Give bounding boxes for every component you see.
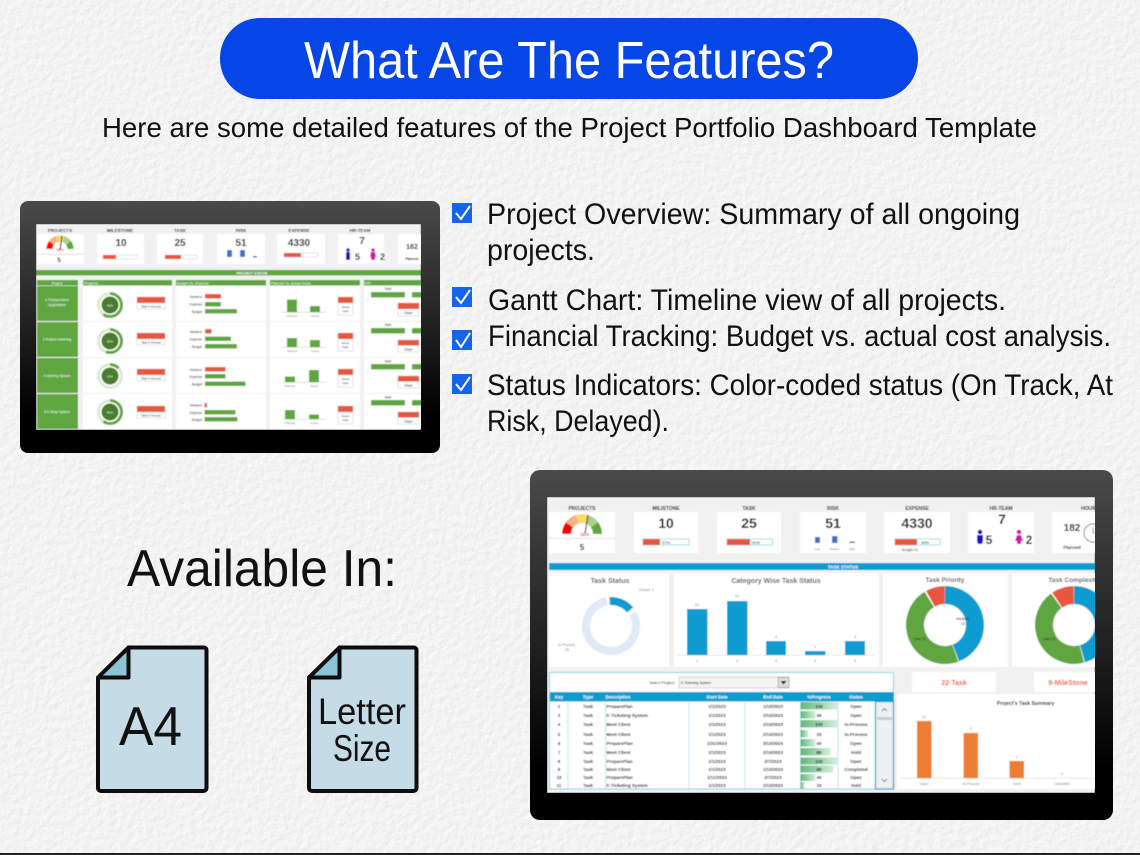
project row 1: Gain: [343, 309, 349, 313]
task table: Task: [583, 704, 593, 709]
task table: 40: [816, 713, 822, 718]
project row 4: Expense: [190, 411, 202, 415]
KPI cards: [549, 506, 1112, 553]
chart: category wise task status: 1: [696, 659, 698, 663]
task table: 2/15/2023: [763, 783, 784, 788]
KPI cards: Low: [815, 547, 821, 551]
chart: category wise task status: 10: [695, 603, 699, 607]
chart: project's task summary: 1: [1016, 755, 1018, 759]
task table: Open: [850, 741, 862, 746]
KPI row: RISK: [236, 228, 247, 233]
KPI row: 51: [235, 238, 247, 249]
project row 4: Budget: [192, 418, 202, 422]
project row 1: 60%: [107, 304, 113, 308]
KPI cards: 7: [998, 511, 1006, 527]
project row 2: Days: [405, 348, 413, 352]
KPI cards: High: [849, 547, 855, 551]
task table: 1/1/2023: [708, 732, 726, 737]
project row 3: Variance: [190, 368, 202, 372]
project row 4: Actual: [310, 421, 318, 425]
chart: category wise task status: 4: [814, 659, 816, 663]
task table: In-Process: [844, 722, 868, 727]
icon: A4 document: [98, 648, 206, 791]
task table: Task: [583, 741, 593, 746]
KPI cards: TASK: [742, 506, 756, 512]
chart: project's task summary: Project's Task Summary: [997, 701, 1054, 707]
column headers: Progress: [84, 282, 98, 286]
task table: Open: [850, 775, 862, 780]
project row 1: Hours: [342, 305, 350, 309]
feature checklist: [452, 198, 1113, 438]
KPI row: MILESTONE: [107, 228, 133, 233]
chart: project's task summary: 0: [1061, 772, 1063, 776]
chart: category wise task status: 1: [814, 645, 816, 649]
chart: task status donut: Task Status: [591, 578, 629, 585]
icon: Letter Size document: [309, 648, 416, 791]
task table: 100: [815, 704, 823, 709]
feature: status indicators: [487, 369, 1113, 438]
project row 4: Hours: [342, 414, 350, 418]
chart: category wise task status: 3: [775, 659, 777, 663]
task table: 2/7/2023: [764, 775, 782, 780]
KPI row: 2: [380, 252, 385, 262]
column headers: [37, 280, 424, 286]
task table: Task: [583, 767, 593, 772]
task table: 1/1/2023: [708, 759, 726, 764]
task table: 1/1/2023: [708, 767, 726, 772]
task table: [550, 672, 894, 789]
KPI row: 4330: [288, 238, 311, 249]
task table: Task: [583, 783, 593, 788]
project row 3: Hours: [342, 377, 350, 381]
task table: Task: [583, 732, 593, 737]
project row 3: Planned: [285, 384, 296, 388]
task table: 40: [816, 775, 822, 780]
task table: Open: [850, 704, 862, 709]
chart: task priority donut: Low, 11: [914, 637, 926, 641]
KPI cards: 5: [580, 543, 585, 552]
project row 1: Days: [405, 311, 413, 315]
KPI cards: HOURS: [1081, 506, 1100, 512]
project row 1: Expense: [190, 302, 202, 306]
project row 2: Task In Process: [141, 340, 161, 344]
chart: task priority donut: 13: [961, 622, 965, 626]
feature: gantt chart: Gantt Chart: Timeline view of all projects.: [488, 284, 1006, 317]
project status bar: PROJECT STATUS: [237, 272, 268, 276]
count cards: 22-Task: [941, 680, 967, 687]
task table: In-Process: [844, 732, 868, 737]
chart: task priority donut: Medium,: [956, 617, 970, 621]
feature: status indicators: Status Indicators: Color-coded status (On Track, At: [487, 369, 1113, 402]
task table: 90: [816, 767, 822, 772]
chart: task complexity donut: [1012, 572, 1095, 668]
column headers: Project: [52, 282, 62, 286]
project row 2: Actual: [311, 349, 319, 353]
task table: PreparePlan: [606, 704, 633, 709]
KPI cards: MILISTONE: [652, 506, 680, 512]
task table: 5: [558, 732, 561, 737]
KPI cards: Medium: [830, 547, 841, 551]
chart: category wise task status: [674, 573, 879, 667]
project row 4: 5-E-Shop System: [44, 410, 70, 414]
KPI cards: RISK: [827, 506, 839, 512]
feature: project overview: [487, 198, 1020, 267]
title pill: What Are The Features?: [304, 32, 834, 90]
task table: 1/1/2023: [708, 722, 726, 727]
bottom edge line: [0, 853, 1140, 855]
chart: category wise task status: Category Wise Task Status: [731, 578, 821, 585]
KPI cards: 5: [986, 533, 993, 547]
KPI cards: EXPENSE: [905, 506, 929, 512]
feature: status indicators: Risk, Delayed).: [487, 405, 669, 438]
task table: E-Ticketing System: [606, 713, 648, 718]
project row 1: Actual: [311, 314, 319, 318]
chart: category wise task status: 12: [735, 594, 739, 598]
project row 2: [37, 322, 424, 357]
task table: PreparePlan: [606, 741, 633, 746]
project row 4: [37, 394, 424, 429]
task table: 3/10/2023: [763, 741, 784, 746]
KPI cards: HR-TEAM: [989, 506, 1013, 512]
task table: Meet Client: [606, 767, 631, 772]
task table: Meet Client: [606, 750, 631, 755]
chart: category wise task status: 2: [736, 659, 738, 663]
project row 1: Upgradation: [48, 303, 66, 307]
project row 1: Task In Process: [141, 304, 161, 308]
count cards: 9-MileStone: [1048, 680, 1088, 687]
chart: project's task summary: In-Process: [963, 782, 980, 786]
project row 3: 13%: [107, 374, 113, 378]
chart: project's task summary: 12: [922, 715, 926, 719]
KPI cards: 4330: [901, 515, 933, 531]
KPI cards: 51: [825, 515, 841, 531]
project row 2: Variance: [190, 330, 202, 334]
task table: 11: [557, 783, 562, 788]
task table: 80: [816, 750, 822, 755]
chart: task status donut: 25: [565, 648, 569, 652]
chart: project's task summary: Cancelled: [1054, 782, 1070, 786]
chart: task status donut: Closed, 4: [639, 588, 654, 592]
task table: Description: [606, 694, 631, 700]
project row 3: Task In Process: [141, 376, 161, 380]
KPI cards: Budget Vs: [902, 548, 918, 552]
project row 4: Planned: [285, 421, 296, 425]
task table: 20: [816, 732, 822, 737]
chart: project's task summary: Open: [920, 782, 928, 786]
task table: 2/7/2023: [764, 759, 782, 764]
project row 1: Variance: [190, 295, 202, 299]
task table: Task: [583, 750, 593, 755]
task table: 2: [558, 704, 561, 709]
title pill: [220, 18, 918, 99]
KPI row: TASK: [174, 228, 187, 233]
task table: Hold: [851, 750, 861, 755]
project row 2: Budget: [192, 345, 202, 349]
project row 2: 56%: [107, 340, 113, 344]
task table: 1/1/2023: [708, 783, 726, 788]
task table: 8: [558, 759, 561, 764]
task table: Key: [555, 694, 564, 700]
column headers: KPI: [365, 282, 371, 286]
task status bar: TASK STATUS: [828, 564, 858, 570]
KPI row: Planned: [405, 257, 419, 261]
KPI row: 5: [57, 258, 61, 264]
chart: task status donut: [549, 573, 669, 667]
feature: project overview: Project Overview: Summary of all ongoing: [487, 198, 1020, 231]
project row 3: Days: [405, 384, 413, 388]
KPI row: HR-TEAM: [350, 228, 371, 233]
KPI cards: Planned: [1063, 545, 1081, 550]
task table: %Progress: [807, 694, 831, 700]
icon: checkbox 2: [452, 287, 472, 307]
project row 3: Budget: [192, 382, 202, 386]
chart: project's task summary: Hold: [1013, 782, 1021, 786]
KPI row: 10: [115, 238, 127, 249]
column headers: Budget Vs. Expense: [177, 282, 209, 286]
project row 2: Planned: [287, 349, 298, 353]
chart: task priority donut: Task Priority: [926, 577, 965, 584]
task table: Status: [849, 694, 863, 700]
KPI cards: 10: [658, 515, 674, 531]
task table: End Date: [763, 694, 783, 700]
task table: 1/10/2023: [763, 704, 784, 709]
task table: Select Project:: [649, 680, 675, 685]
project row 3: [37, 358, 424, 393]
chart: category wise task status: 5: [854, 659, 856, 663]
task table: Meet Client: [606, 732, 631, 737]
chart: category wise task status: 3: [775, 635, 777, 639]
task table: 4: [558, 722, 561, 727]
task table: 100: [815, 722, 823, 727]
KPI cards: 37%: [662, 540, 670, 545]
project row 4: Days: [405, 420, 413, 424]
task table: Task: [583, 713, 593, 718]
icon: checkbox 4: [452, 374, 472, 394]
KPI row: PROJECTS: [48, 228, 72, 233]
task table: Start Date: [706, 694, 728, 700]
task table: 10: [556, 775, 562, 780]
task table: 6: [558, 741, 561, 746]
icon: checkbox 1: [452, 203, 472, 223]
chart: project's task summary: [897, 694, 1097, 789]
KPI cards: 49%: [921, 540, 929, 545]
project row 3: 4-Gaming System: [44, 374, 70, 378]
project row 2: Start: [385, 323, 391, 327]
KPI row: EXPENSE: [288, 228, 310, 233]
task table: 1/10/2023: [763, 767, 784, 772]
KPI cards: 2: [1026, 533, 1033, 547]
task table: 10: [816, 783, 822, 788]
project row 4: Task In Process: [141, 414, 161, 418]
project row 3: Actual: [310, 384, 318, 388]
task table: Open: [850, 759, 862, 764]
subtitle: Here are some detailed features of the Project Portfolio Dashboard Template: [102, 112, 1037, 143]
project row 3: Gain: [343, 381, 349, 385]
project row 2: Gain: [343, 345, 349, 349]
icon: A4 document: A4: [119, 695, 182, 757]
task table: PreparePlan: [606, 759, 633, 764]
task table: 3: [558, 713, 561, 718]
icon: Letter Size document: Size: [333, 728, 391, 769]
KPI row: 5: [355, 252, 360, 262]
project row 2: Hours: [342, 341, 350, 345]
project row 3: Expense: [190, 375, 202, 379]
task table: Hold: [851, 783, 861, 788]
task table: 2/15/2023: [763, 732, 784, 737]
project row 2: 2-Project Gamming: [43, 338, 71, 342]
project row 1: 1-Transportation: [45, 298, 69, 302]
task table: Task: [583, 722, 593, 727]
task table: Task: [583, 775, 593, 780]
chart: category wise task status: 3: [854, 635, 856, 639]
task table: 100: [815, 759, 823, 764]
chart: task status donut: In-Process,: [558, 643, 576, 647]
task table: E-Ticketing System: [606, 783, 648, 788]
task table: 2/15/2023: [763, 722, 784, 727]
task table: 40: [816, 741, 822, 746]
heading: available in: Available In:: [127, 540, 397, 598]
task table: 1/1/2023: [708, 704, 726, 709]
task table: 2/15/2023: [763, 713, 784, 718]
KPI row: [37, 228, 428, 264]
task table: 9: [558, 767, 561, 772]
chart: task complexity donut: Task Complexity: [1048, 577, 1100, 584]
task table: 1/1/2023: [708, 750, 726, 755]
KPI row: 25: [174, 238, 186, 249]
KPI row: 56%: [56, 248, 64, 252]
task status bar: [549, 563, 1099, 570]
KPI cards: 51%: [752, 540, 760, 545]
project row 4: Gain: [343, 418, 349, 422]
project row 1: Start: [385, 287, 391, 291]
task table: 7: [558, 750, 561, 755]
KPI cards: PROJECTS: [569, 506, 596, 512]
panel: green project status dashboard tablet: [20, 201, 440, 453]
KPI row: 182: [406, 244, 418, 251]
panel: blue task status dashboard tablet: [530, 470, 1116, 820]
project row 1: Planned: [287, 314, 298, 318]
task table: E-Ticketing System: [681, 681, 711, 685]
project row 1: Budget: [192, 310, 202, 314]
project row 4: Variance: [190, 404, 202, 408]
task table: Open: [850, 713, 862, 718]
KPI cards: 182: [1064, 523, 1081, 534]
task table: Type: [583, 694, 594, 700]
count cards: [912, 672, 1104, 692]
project row 3: Start: [385, 360, 391, 364]
project status bar: [36, 270, 421, 276]
KPI row: 7: [359, 236, 365, 247]
task table: PreparePlan: [606, 775, 633, 780]
project row 2: Expense: [190, 338, 202, 342]
project row 1: [37, 286, 424, 321]
feature: financial tracking: Financial Tracking: Budget vs. actual cost analysis.: [488, 320, 1111, 353]
KPI cards: 25: [741, 515, 757, 531]
task table: 1/1/2023: [708, 713, 726, 718]
task table: Completed: [844, 767, 868, 772]
task table: 2/15/2023: [763, 750, 784, 755]
column headers: Planned Vs. Actual Hours: [271, 282, 311, 286]
chart: task complexity donut: Low, 13: [1043, 637, 1055, 641]
task table: 1/11/2023: [707, 775, 727, 780]
feature: project overview: projects.: [487, 234, 595, 267]
project row 4: 60%: [107, 410, 113, 414]
project row 4: Start: [385, 396, 391, 400]
icon: Letter Size document: Letter: [318, 691, 406, 732]
chart: task priority donut: [883, 573, 1008, 667]
task table: Meet Client: [606, 722, 631, 727]
chart: project's task summary: 8: [970, 727, 972, 731]
task table: Task: [583, 759, 593, 764]
icon: checkbox 3: [452, 330, 472, 350]
KPI cards: 56%: [580, 532, 590, 537]
task table: 1/31/2023: [707, 741, 728, 746]
